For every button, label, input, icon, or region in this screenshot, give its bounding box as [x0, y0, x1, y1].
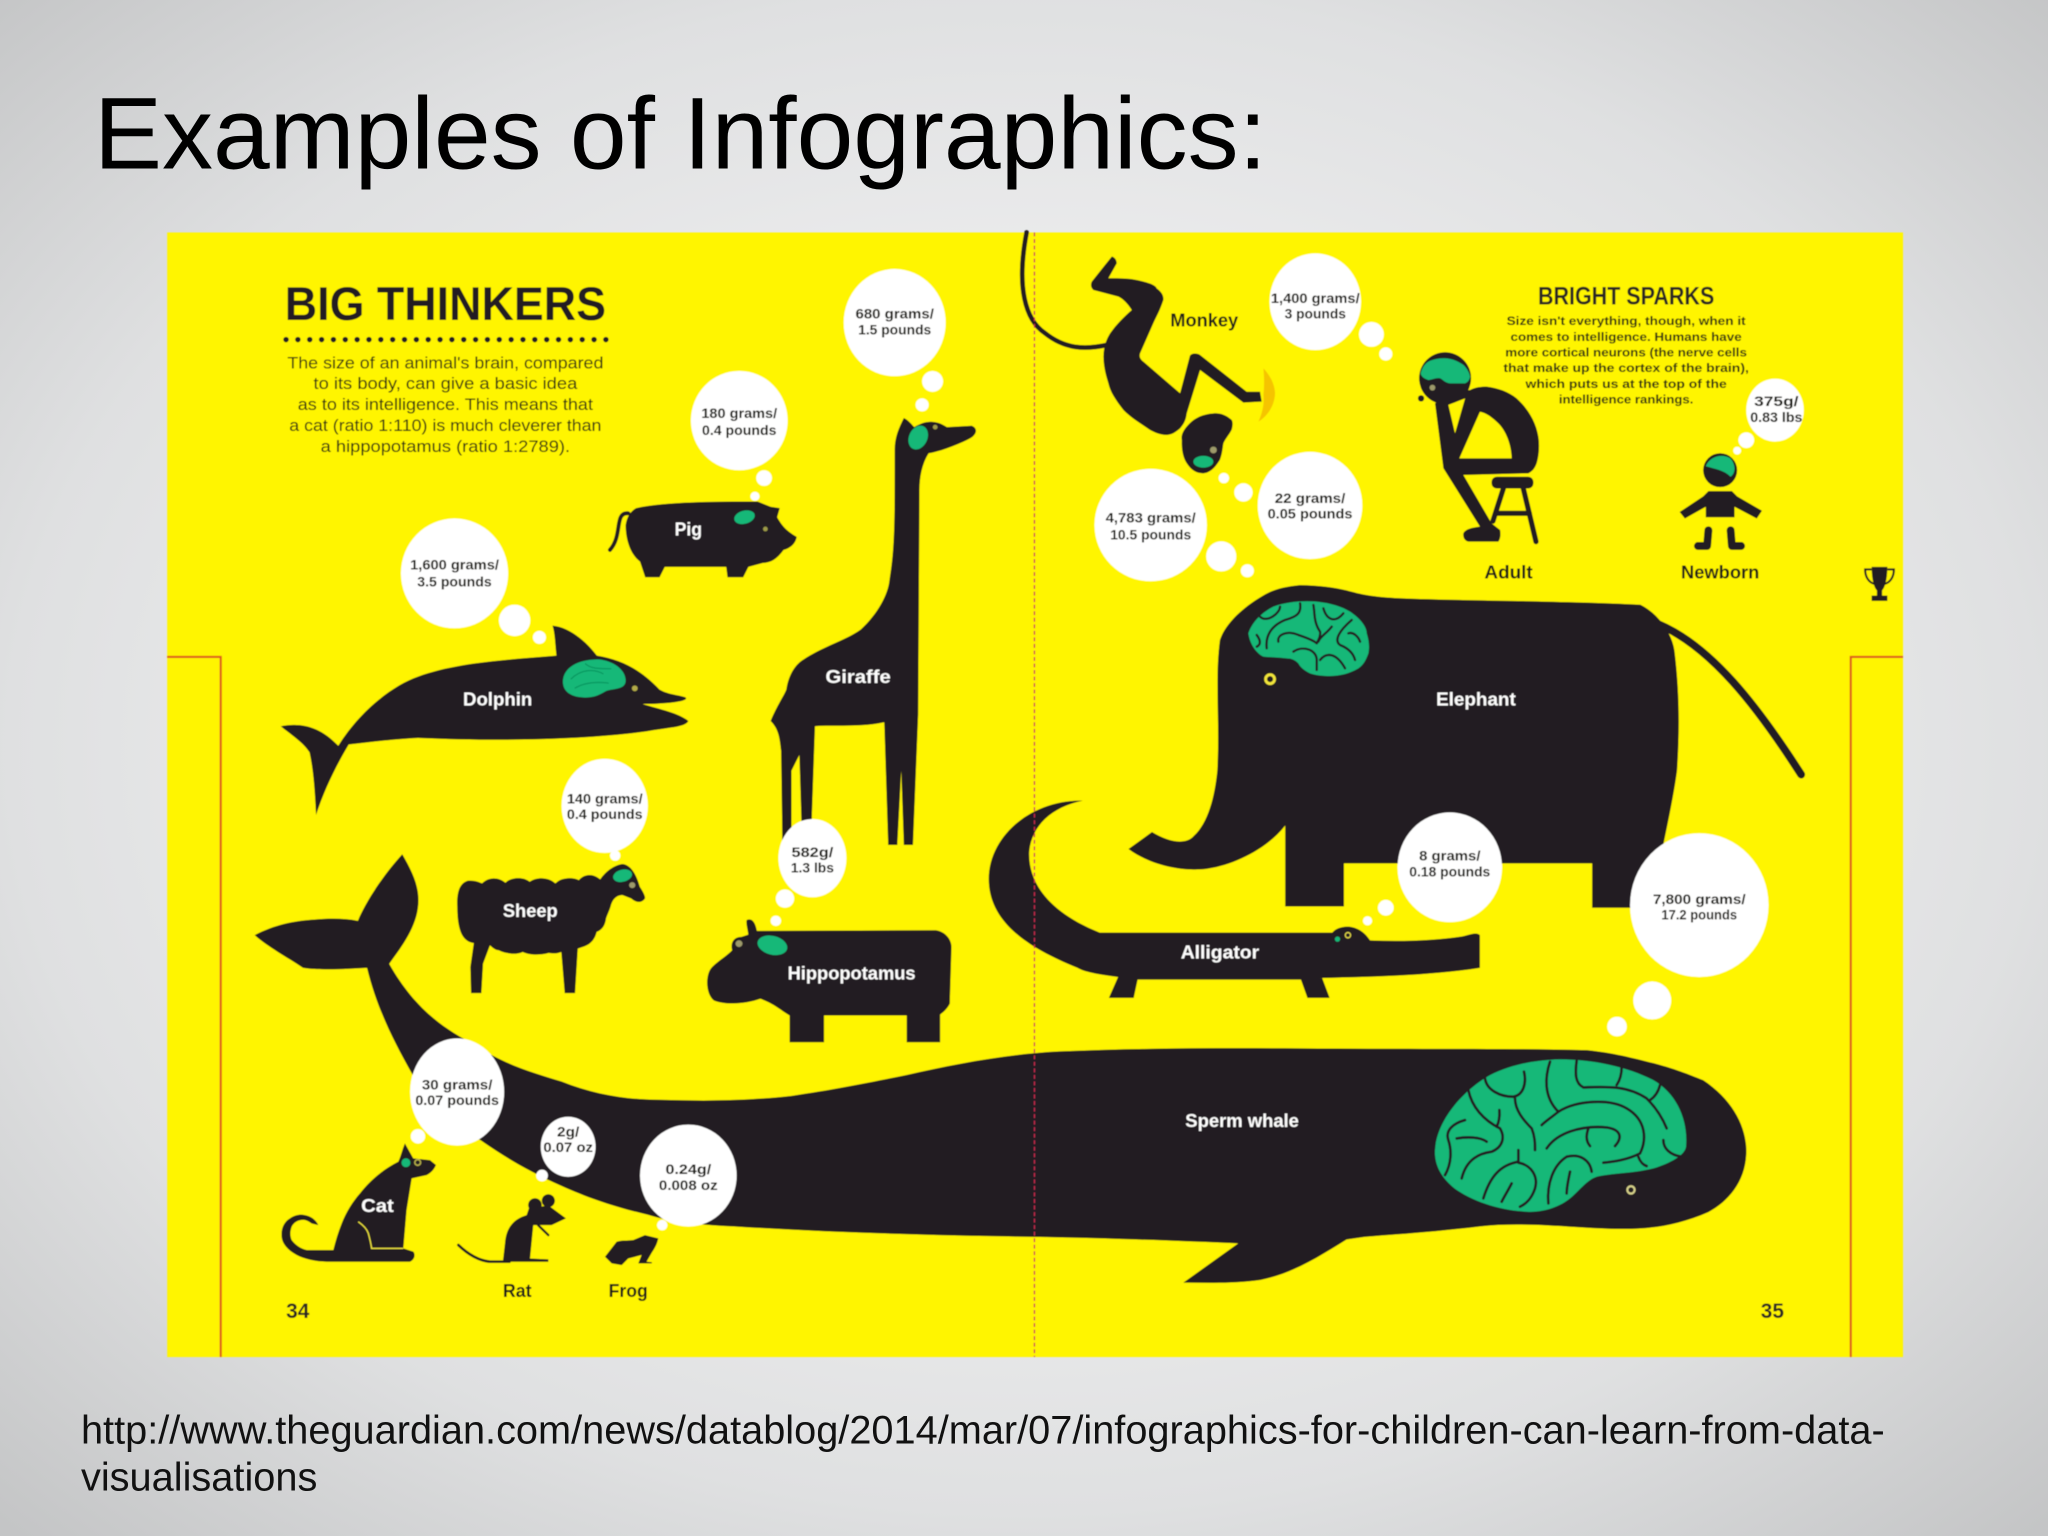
thought bubble: frog — [640, 1125, 737, 1230]
thought bubble: newborn: 0.83 lbs — [1750, 410, 1803, 425]
animal: pig — [610, 502, 797, 577]
giraffe brain — [905, 422, 932, 453]
animal: hippopotamus — [707, 919, 952, 1042]
label: hippopotamus: Hippopotamus — [788, 963, 916, 984]
dolphin brain — [563, 659, 626, 697]
label: sheep: Sheep — [503, 900, 558, 921]
newborn legs — [1698, 530, 1741, 546]
text block: big thinkers intro: The size of an animal's brain, compared — [287, 354, 603, 372]
adult brain — [1421, 358, 1470, 383]
figure: newborn — [1680, 453, 1762, 583]
thought bubble: giraffe — [844, 269, 946, 411]
thought bubble: sperm whale: 17.2 pounds — [1661, 908, 1737, 923]
thought bubble: hippopotamus: 1.3 lbs — [791, 860, 834, 875]
monkey tail — [1022, 232, 1108, 348]
monkey body — [1091, 257, 1262, 435]
thought bubble: sheep: 0.4 pounds — [567, 807, 643, 822]
thought bubble: monkey — [1219, 452, 1362, 559]
text block: big thinkers intro: a cat (ratio 1:110) is much cleverer than — [289, 417, 601, 435]
thought bubble: rat: 2g/ — [557, 1124, 579, 1139]
monkey eye — [1210, 447, 1217, 453]
thought bubble: elephant: 10.5 pounds — [1110, 527, 1192, 542]
thought bubble: hippopotamus — [771, 819, 846, 926]
thought bubble: giraffe: 680 grams/ — [856, 307, 934, 322]
thought bubble: elephant: 4,783 grams/ — [1106, 510, 1196, 525]
text block: bright sparks: intelligence rankings. — [1559, 393, 1693, 407]
label: newborn: Newborn — [1681, 562, 1759, 583]
thought bubble: sperm whale — [1607, 833, 1768, 1036]
label: sperm whale: Sperm whale — [1185, 1110, 1299, 1131]
thought bubble: giraffe: 1.5 pounds — [858, 322, 932, 337]
thought bubble: elephant — [1095, 469, 1254, 581]
animal: sheep — [457, 864, 645, 993]
thought bubble: frog: 0.24g/ — [665, 1162, 711, 1177]
source url caption: visualisations — [81, 1455, 317, 1499]
thought bubble: alligator — [1363, 812, 1502, 925]
monkey head — [1182, 413, 1233, 473]
branch crescent — [1258, 368, 1275, 422]
dolphin brain folds — [571, 664, 611, 688]
animal: giraffe — [771, 418, 976, 845]
heading: bright sparks: BRIGHT SPARKS — [1538, 283, 1714, 310]
animal: elephant — [1128, 585, 1801, 908]
label: giraffe: Giraffe — [825, 666, 891, 687]
label: pig: Pig — [675, 519, 702, 540]
newborn brain — [1706, 456, 1735, 477]
label: alligator: Alligator — [1181, 942, 1259, 963]
source url caption — [81, 1408, 1885, 1499]
source url caption: http://www.theguardian.com/news/datablog/2014/mar/07/infographics-for-children-can-learn-from-data- — [81, 1408, 1885, 1452]
animal: frog — [605, 1235, 658, 1301]
page number 34: 34 — [286, 1300, 310, 1323]
adult nose — [1418, 395, 1424, 402]
elephant brain — [1248, 601, 1369, 676]
thought bubble: pig: 0.4 pounds — [702, 423, 777, 438]
cat leg line — [358, 1222, 403, 1248]
thought bubble: cat: 0.07 pounds — [415, 1093, 499, 1108]
sheep eye — [629, 882, 635, 888]
pig eye — [763, 527, 768, 531]
thought bubble: cat — [410, 1038, 504, 1145]
thought bubble: sperm whale: 7,800 grams/ — [1653, 892, 1746, 907]
page frame line: right — [1851, 657, 1903, 1357]
heading: big thinkers: BIG THINKERS — [285, 277, 606, 330]
animal: cat — [281, 1143, 436, 1262]
rat tail — [458, 1245, 509, 1262]
dolphin eye — [632, 685, 638, 691]
whale eye — [1627, 1186, 1635, 1194]
thought bubble: human adult — [1270, 253, 1392, 360]
label: monkey: Monkey — [1170, 310, 1239, 331]
elephant eye — [1266, 675, 1275, 684]
text block: bright sparks: that make up the cortex of the brain), — [1503, 361, 1749, 375]
sheep brain — [612, 868, 633, 884]
animal: alligator — [989, 801, 1480, 998]
pig tail — [610, 513, 628, 550]
text block: bright sparks — [1503, 314, 1749, 407]
thought bubble: monkey: 0.05 pounds — [1268, 507, 1353, 522]
rat arm — [538, 1225, 548, 1235]
adult eye — [1430, 385, 1435, 391]
text block: bright sparks: Size isn't everything, though, when it — [1507, 314, 1746, 328]
newborn body — [1680, 491, 1762, 519]
text block: bright sparks: which puts us at the top of the — [1524, 377, 1727, 391]
thought bubble: sheep: 140 grams/ — [567, 791, 643, 806]
animal: monkey — [1022, 232, 1275, 473]
thought bubble: cat: 30 grams/ — [422, 1077, 493, 1092]
thought bubble: human adult: 3 pounds — [1285, 307, 1346, 322]
thought bubble: pig: 180 grams/ — [701, 406, 777, 421]
thought bubble: human adult: 1,400 grams/ — [1271, 291, 1360, 306]
text block: bright sparks: more cortical neurons (the nerve cells — [1505, 346, 1747, 360]
animal: dolphin — [281, 626, 688, 815]
whale brain — [1435, 1059, 1686, 1212]
text block: big thinkers intro: a hippopotamus (ratio 1:2789). — [321, 438, 570, 456]
label: dolphin: Dolphin — [463, 688, 532, 709]
text block: big thinkers intro: as to its intelligence. This means that — [298, 396, 593, 414]
thought bubble: alligator: 8 grams/ — [1419, 849, 1481, 864]
thought bubble: rat — [536, 1117, 596, 1181]
title: Examples of Infographics: — [94, 76, 1267, 190]
thought bubble: monkey: 22 grams/ — [1275, 491, 1346, 506]
panel: yellow book spread — [167, 232, 1903, 1357]
alligator eye and brain — [1335, 933, 1351, 942]
adult head — [1419, 352, 1471, 404]
thought bubble: frog: 0.008 oz — [659, 1178, 718, 1193]
adult body — [1435, 387, 1539, 542]
label: elephant: Elephant — [1436, 688, 1516, 709]
elephant tail — [1659, 624, 1801, 775]
giraffe eye — [933, 425, 938, 429]
text block: big thinkers intro: to its body, can give a basic idea — [313, 375, 578, 393]
pig brain — [733, 508, 756, 526]
thought bubble: rat: 0.07 oz — [543, 1140, 593, 1155]
thought bubble: sheep — [562, 759, 648, 861]
dotted rule — [286, 337, 606, 342]
whale brain folds — [1445, 1061, 1682, 1207]
label: cat: Cat — [361, 1195, 394, 1216]
thought bubble: newborn — [1733, 379, 1804, 455]
text block: bright sparks: comes to intelligence. Humans have — [1511, 330, 1742, 344]
cat eye and brain — [402, 1158, 421, 1167]
animal: sperm whale — [255, 854, 1746, 1283]
thought bubble: alligator: 0.18 pounds — [1409, 864, 1491, 879]
thought bubble: dolphin: 1,600 grams/ — [410, 557, 499, 572]
thought bubble: hippopotamus: 582g/ — [792, 845, 834, 860]
text block: big thinkers intro — [287, 354, 603, 456]
label: adult: Adult — [1484, 562, 1533, 583]
thought bubble: dolphin: 3.5 pounds — [417, 574, 492, 589]
hippo brain — [755, 932, 790, 958]
monkey brain — [1193, 456, 1213, 468]
thought bubble: pig — [691, 371, 788, 501]
page frame line: left — [167, 657, 221, 1357]
thought bubble: dolphin — [401, 519, 546, 644]
icon: trophy — [1865, 567, 1894, 601]
figure: adult human — [1418, 352, 1539, 583]
thought bubble: newborn: 375g/ — [1754, 394, 1799, 409]
stool — [1492, 477, 1536, 542]
animal: rat — [458, 1194, 566, 1301]
label: rat: Rat — [503, 1280, 532, 1301]
hippo eye — [736, 940, 742, 947]
label: frog: Frog — [609, 1280, 648, 1301]
elephant brain folds — [1257, 603, 1360, 670]
book spine dashed line — [1033, 232, 1035, 1357]
page number 35: 35 — [1761, 1300, 1784, 1323]
